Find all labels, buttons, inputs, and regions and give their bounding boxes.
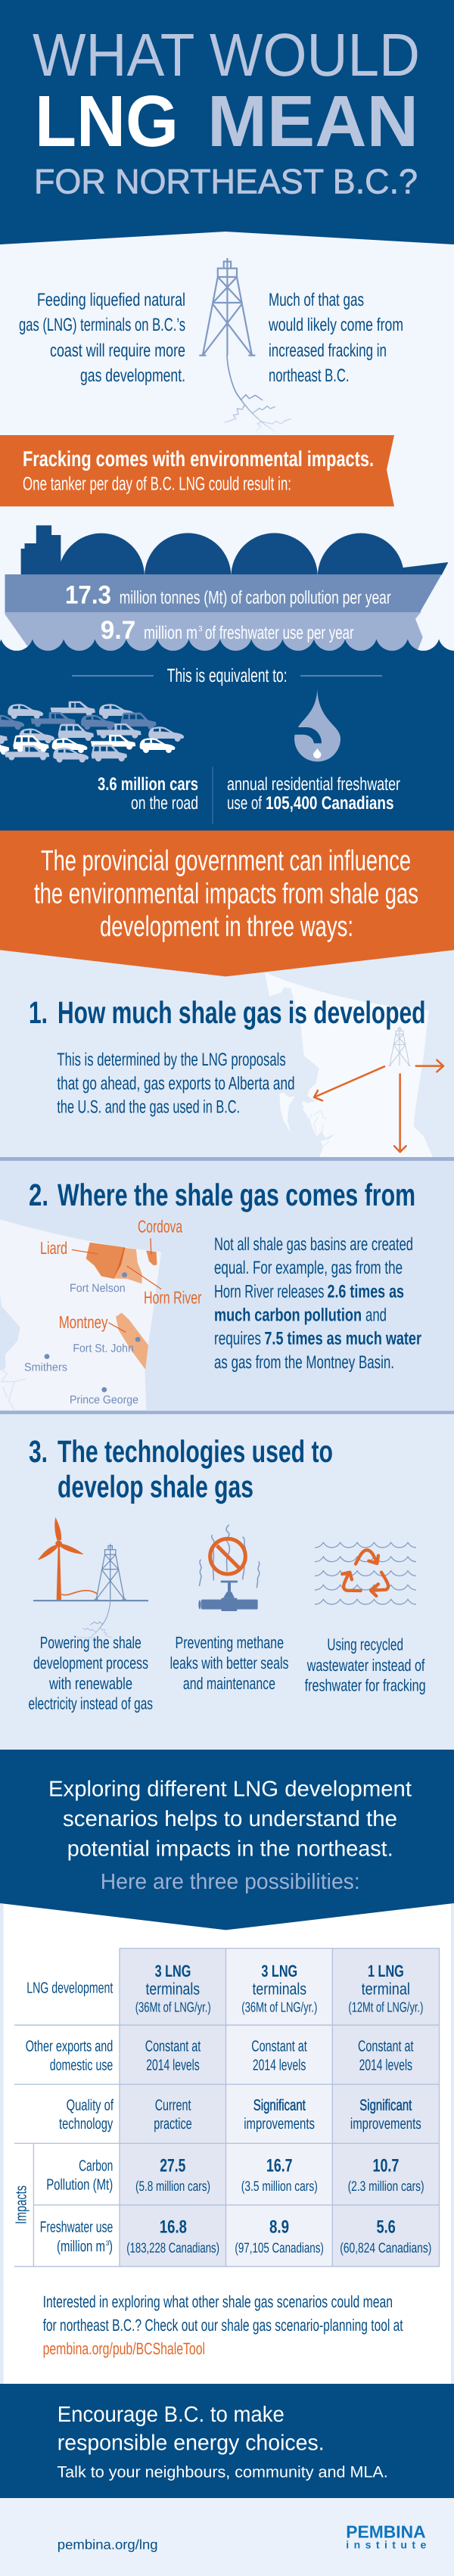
map: northeast B.C. basins (0, 1219, 161, 1410)
caption: recycled wastewater: Using recycled (327, 1635, 403, 1654)
icon: recycled water (315, 1542, 416, 1604)
stat: freshwater use (101, 616, 354, 645)
orange banner: three ways: development in three ways: (100, 911, 353, 943)
stat: carbon pollution (65, 581, 391, 610)
row: LNG development: LNG development (26, 1979, 114, 1996)
waves (315, 1542, 416, 1604)
caption: methane leaks (170, 1633, 289, 1693)
icon: cars (0, 702, 184, 763)
rising gas (199, 1525, 260, 1588)
row: freshwater use: (97,105 Canadians) (235, 2240, 324, 2256)
text: basins comparison: and (365, 1305, 387, 1325)
map labels: cities: Smithers (24, 1361, 67, 1374)
row: quality of technology: Quality of (67, 2097, 114, 2114)
row: other exports: domestic use (50, 2057, 113, 2074)
row: freshwater use: (183,228 Canadians) (126, 2240, 219, 2256)
scenario table (12, 1949, 439, 2266)
row: freshwater use: 8.9 (269, 2217, 289, 2238)
row: other exports: Constant at (145, 2038, 201, 2055)
row: LNG development: (12Mt of LNG/yr.) (348, 1999, 423, 2014)
row: carbon pollution: 16.7 (266, 2155, 292, 2176)
blue banner: call to action (0, 2384, 454, 2498)
text: scenario tool callout: pembina.org/pub/BCShaleTool (43, 2339, 205, 2358)
caption: methane leaks: leaks with better seals (170, 1654, 289, 1672)
panel: way 1 background (0, 950, 454, 1158)
blue banner: scenarios: potential impacts in the northeast. (67, 1837, 393, 1862)
text: how much: the U.S. and the gas used in B.C. (57, 1097, 240, 1118)
caption: renewable power: with renewable (48, 1674, 132, 1693)
caption: recycled wastewater (305, 1635, 426, 1695)
icon: water drop with faucet (290, 689, 340, 761)
leader lines (72, 1238, 161, 1333)
row: freshwater use: 3 (106, 2239, 110, 2247)
water (0, 639, 454, 832)
row: quality of technology: improvements (350, 2115, 421, 2133)
row: carbon pollution: (5.8 million cars) (135, 2178, 210, 2194)
intro text left (19, 290, 185, 386)
row: LNG development: terminal (362, 1979, 410, 1998)
intro text right (268, 290, 403, 386)
icon: wind turbine and rig (33, 1517, 148, 1644)
icon: methane leak and valve (198, 1525, 260, 1611)
row: freshwater use: 5.6 (377, 2217, 396, 2238)
text: basins comparison (214, 1234, 421, 1373)
caption: renewable power: Powering the shale (40, 1633, 141, 1652)
turbine (38, 1517, 98, 1600)
row: freshwater use: Freshwater use (40, 2218, 113, 2235)
header banner (0, 0, 454, 244)
intro text right: increased fracking in (269, 341, 387, 361)
logo: Pembina Institute: PEMBINA (346, 2522, 426, 2541)
lower hull (5, 611, 423, 652)
map labels: basins: Montney (59, 1312, 108, 1332)
orange ribbon: fracking impacts (0, 435, 394, 506)
map labels: cities (24, 1282, 138, 1406)
logo: Pembina Institute (346, 2522, 427, 2551)
heading 1: 1. (29, 995, 48, 1030)
row label: impacts: Impacts (12, 2186, 30, 2224)
logo: Pembina Institute: institute (346, 2539, 427, 2551)
row: quality of technology: improvements (244, 2115, 315, 2133)
caption: methane leaks: and maintenance (183, 1674, 275, 1693)
cars equivalent text (98, 774, 198, 814)
title: LNG: LNG (35, 81, 179, 162)
footer (0, 2498, 454, 2576)
caption: methane leaks: Preventing methane (176, 1633, 284, 1652)
row: quality of technology: technology (59, 2115, 114, 2133)
row: freshwater use (40, 2217, 431, 2256)
footer url: pembina.org/lng (58, 2537, 158, 2552)
text: scenario tool callout (43, 2292, 403, 2358)
text: how much: that go ahead, gas exports to Alberta and (57, 1073, 295, 1094)
row: other exports: Constant at (251, 2038, 307, 2055)
intro text right: northeast B.C. (269, 366, 350, 386)
text: basins comparison: much carbon pollution (214, 1305, 362, 1325)
row: LNG development (26, 1962, 423, 2014)
tanker ship (5, 525, 448, 652)
orange banner: three ways (0, 831, 454, 976)
heading 3 (29, 1434, 333, 1504)
blue banner: call to action: Talk to your neighbours, community and MLA. (57, 2463, 388, 2481)
stat: freshwater use: million m (144, 623, 197, 643)
divider 1 (0, 1157, 454, 1161)
table cells (120, 1949, 439, 2266)
row: LNG development: 3 LNG (261, 1962, 297, 1980)
icon: small rig (388, 1027, 411, 1066)
blue banner: scenarios (0, 1750, 454, 1930)
basin: Horn River (114, 1248, 142, 1283)
intro text right: Much of that gas (269, 290, 364, 310)
text: basins comparison: requires (214, 1328, 261, 1349)
row: quality of technology: Significant (253, 2097, 306, 2114)
row: freshwater use: (million m (57, 2238, 105, 2255)
caption: renewable power: electricity instead of gas (29, 1694, 153, 1713)
row: freshwater use: 16.8 (160, 2217, 187, 2238)
row: carbon pollution: (2.3 million cars) (348, 2178, 424, 2194)
heading 3: 3. (29, 1434, 48, 1469)
heading 3: develop shale gas (58, 1470, 253, 1504)
row: carbon pollution: (3.5 million cars) (241, 2178, 318, 2194)
blue banner: call to action: Encourage B.C. to make (58, 2403, 285, 2427)
panel: way 2 background (0, 1161, 454, 1411)
intro text left: gas development. (80, 366, 185, 386)
row: quality of technology: Current (155, 2097, 191, 2114)
row: carbon pollution: Carbon (79, 2158, 113, 2175)
title: mean: MEAN (207, 81, 418, 162)
row: LNG development: 1 LNG (368, 1962, 404, 1980)
text: how much (57, 1050, 295, 1118)
row: carbon pollution (46, 2155, 424, 2194)
sliver between basins (114, 1247, 125, 1278)
title: for northeast B.C.: FOR NORTHEAST B.C.? (34, 162, 418, 201)
panel: scenarios white background (0, 1899, 454, 2385)
divider 2 (0, 1411, 454, 1414)
caption: renewable power: development process (33, 1654, 148, 1672)
intro text left: Feeding liquefied natural (37, 290, 185, 310)
recycling arrows (342, 1550, 388, 1596)
stat: freshwater use: of freshwater use per year (205, 623, 354, 643)
caption: renewable power (29, 1633, 153, 1713)
map labels: cities: Fort Nelson (70, 1282, 126, 1295)
cars equivalent text: on the road (131, 793, 198, 814)
intro text right: would likely come from (268, 315, 403, 335)
hull band: carbon (5, 574, 442, 612)
icon: drilling rig with fractures (199, 258, 291, 435)
blue banner: call to action: responsible energy choices. (58, 2431, 325, 2455)
row: other exports: 2014 levels (146, 2057, 200, 2074)
panel: way 3 background (0, 1414, 454, 1750)
row: other exports: Constant at (358, 2038, 414, 2055)
row: LNG development: terminals (253, 1979, 306, 1998)
row: quality of technology: practice (154, 2115, 192, 2133)
row: LNG development: (36Mt of LNG/yr.) (241, 1999, 317, 2014)
text: how much: This is determined by the LNG proposals (57, 1050, 286, 1070)
heading 3: The technologies used to (58, 1434, 333, 1469)
row: carbon pollution: 27.5 (160, 2155, 185, 2176)
text: basins comparison: 2.6 times as (327, 1281, 404, 1302)
stat: freshwater use: 9.7 (101, 616, 135, 645)
row: other exports (26, 2038, 414, 2074)
map labels: basins: Liard (40, 1238, 67, 1258)
row: LNG development: 3 LNG (155, 1962, 191, 1980)
row: other exports: Other exports and (26, 2038, 113, 2055)
row: other exports: 2014 levels (359, 2057, 412, 2074)
intro text left: gas (LNG) terminals on B.C.’s (19, 315, 185, 335)
table panel (4, 1899, 451, 2385)
row: freshwater use: ) (109, 2238, 113, 2255)
table grid (14, 1949, 439, 2266)
orange ribbon: fracking impacts: One tanker per day of B.C. LNG could result in: (23, 474, 291, 495)
ground line (33, 1600, 148, 1601)
row: quality of technology (59, 2097, 421, 2133)
blue banner: scenarios: Exploring different LNG development (48, 1778, 412, 1802)
blue banner: scenarios: scenarios helps to understand the (63, 1807, 397, 1831)
city dots (45, 1272, 141, 1392)
map labels: basins: Cordova (138, 1217, 182, 1237)
intro text left: coast will require more (50, 341, 185, 361)
map labels: cities: Fort St. John (73, 1342, 134, 1355)
row: LNG development: terminals (145, 1979, 200, 1998)
basin: Montney (116, 1313, 148, 1370)
stat: carbon pollution: 17.3 (65, 581, 111, 610)
blue banner: scenarios: Here are three possibilities: (101, 1870, 360, 1894)
map labels: basins: Horn River (144, 1288, 202, 1308)
rig with well (74, 1544, 126, 1644)
water equivalent text: 105,400 Canadians (266, 793, 393, 814)
heading 2: 2. (29, 1178, 48, 1212)
ship superstructure and domes (21, 525, 448, 577)
equivalent heading: This is equivalent to: (167, 665, 288, 686)
basin: Cordova (146, 1250, 157, 1265)
row: LNG development: (36Mt of LNG/yr.) (135, 1999, 211, 2014)
arrows: gas destinations (314, 1060, 443, 1152)
water equivalent text: use of (227, 793, 262, 814)
water equivalent text (227, 774, 400, 814)
map labels: basins (40, 1217, 202, 1332)
basin: Liard (86, 1243, 125, 1279)
divider (212, 767, 213, 824)
no symbol (210, 1538, 245, 1574)
map: British Columbia (265, 972, 434, 1158)
row: carbon pollution: 10.7 (372, 2155, 399, 2176)
title: what would: WHAT WOULD (33, 21, 420, 89)
row: carbon pollution: Pollution (Mt) (46, 2176, 113, 2193)
valve and pipe (198, 1581, 258, 1611)
text: basins comparison: Horn River releases (214, 1281, 324, 1302)
water equivalent text: annual residential freshwater (227, 774, 400, 795)
stat: freshwater use: 3 (198, 625, 203, 633)
row: quality of technology: Significant (359, 2097, 412, 2114)
cars equivalent text: 3.6 million cars (98, 774, 198, 795)
map labels: cities: Prince George (70, 1393, 138, 1406)
row: other exports: 2014 levels (253, 2057, 306, 2074)
